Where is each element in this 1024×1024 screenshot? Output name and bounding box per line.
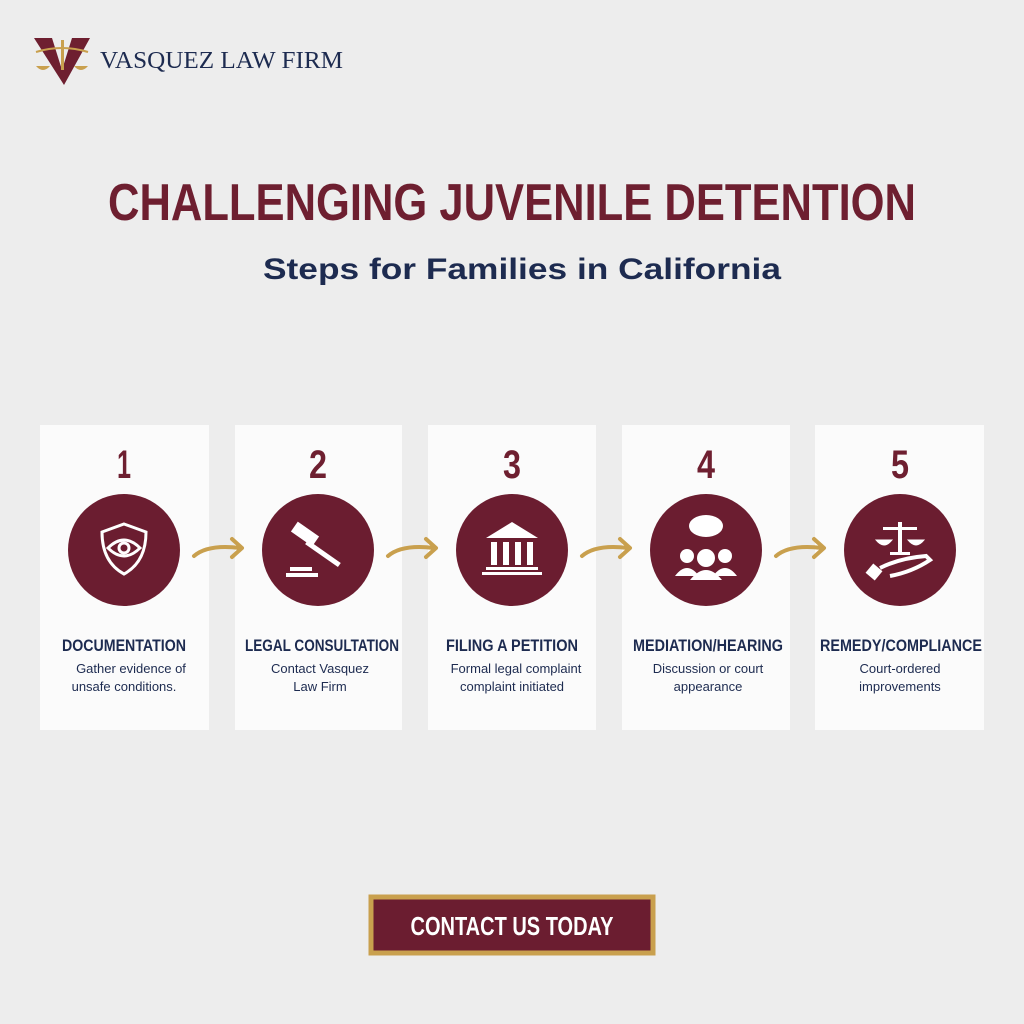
card 3: complaint initiated bbox=[460, 679, 564, 694]
logo bbox=[34, 38, 343, 85]
card 4: MEDIATION/HEARING bbox=[633, 636, 783, 655]
card 4: 4 bbox=[697, 443, 716, 487]
card 3: FILING A PETITION bbox=[446, 636, 578, 655]
card 5 bbox=[815, 425, 984, 730]
arrows bbox=[194, 539, 824, 557]
card 3: 3 bbox=[503, 443, 521, 487]
card 2: Law Firm bbox=[293, 679, 347, 694]
card 1: Gather evidence of bbox=[76, 661, 186, 676]
card 4 bbox=[622, 425, 790, 730]
button: CONTACT US TODAY bbox=[410, 911, 614, 941]
card 5: 5 bbox=[891, 443, 909, 487]
subtitle: Steps for Families in California bbox=[263, 253, 781, 286]
card 3 bbox=[428, 425, 596, 730]
icon: courthouse bbox=[482, 522, 542, 575]
button bbox=[371, 897, 653, 953]
icon: gavel bbox=[286, 522, 341, 577]
icon: shield eye bbox=[102, 524, 146, 574]
icon: people speech bbox=[675, 515, 737, 580]
card 2: Contact Vasquez bbox=[271, 661, 369, 676]
card 5: improvements bbox=[859, 679, 941, 694]
card 5: REMEDY/COMPLIANCE bbox=[820, 636, 982, 655]
card 1 bbox=[40, 425, 209, 730]
card 4: appearance bbox=[674, 679, 742, 694]
card 1: unsafe conditions. bbox=[72, 679, 176, 694]
card 1: DOCUMENTATION bbox=[62, 636, 186, 655]
card 2: LEGAL CONSULTATION bbox=[245, 636, 399, 655]
card 2: 2 bbox=[309, 443, 327, 487]
logo: VASQUEZ LAW FIRM bbox=[100, 48, 343, 74]
icon: scales hand bbox=[866, 522, 930, 580]
card 4: Discussion or court bbox=[653, 661, 764, 676]
card 3: Formal legal complaint bbox=[451, 661, 582, 676]
card 5: Court-ordered bbox=[860, 661, 940, 676]
card 2 bbox=[235, 425, 402, 730]
card 1: 1 bbox=[117, 443, 131, 487]
